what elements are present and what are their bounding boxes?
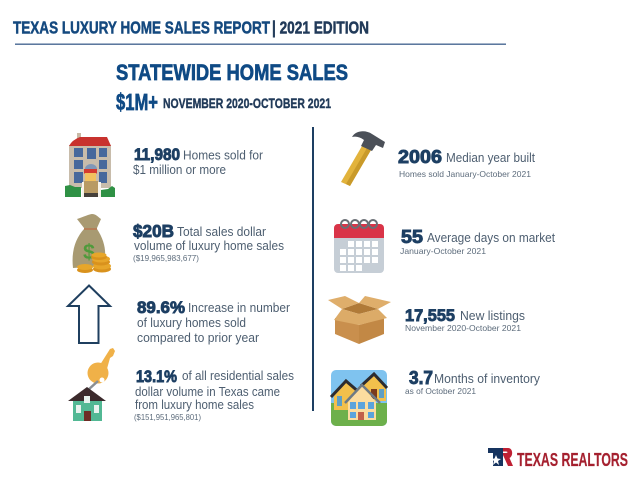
stat: homes sold: $1 million or more [133,162,226,177]
icon: mansion [65,133,115,197]
icon: up arrow [68,286,110,343]
stat: increase: Increase in number [188,300,291,315]
stat: total sales volume: $20B [133,221,174,241]
stat: increase: compared to prior year [137,330,260,345]
stat: new listings [405,306,525,333]
stat: months of inventory: Months of inventory [434,371,540,386]
stat: days on market: Average days on market [427,230,555,245]
stat: total sales volume: ($19,965,983,677) [133,253,199,263]
stat: days on market [400,227,555,256]
report header: | 2021 EDITION [272,18,369,38]
stat: share of sales volume: dollar volume in Texas came [135,384,280,399]
stat: months of inventory: as of October 2021 [405,386,476,396]
stat: new listings: November 2020-October 2021 [405,323,521,333]
stat: median year built: Median year built [446,150,535,165]
title: STATEWIDE HOME SALES [116,60,348,85]
stat: increase [137,298,291,345]
stat: share of sales volume: of all residential sales [182,368,294,383]
stat: months of inventory [405,368,540,396]
stat: new listings: New listings [460,308,525,323]
stat: days on market: January-October 2021 [400,246,486,256]
logo: Texas Realtors [488,448,628,470]
stat: homes sold: 11,980 [134,145,180,164]
stat: total sales volume: volume of luxury home sales [134,238,284,253]
stat: share of sales volume: from luxury home sales [135,397,254,412]
icon: houses [331,370,387,426]
title [116,60,348,115]
stat: days on market: 55 [401,227,423,247]
icon: money bag: $ [83,241,95,264]
stat: new listings: 17,555 [405,306,455,325]
stat: increase: 89.6% [137,298,185,317]
stat: share of sales volume [134,367,294,422]
stat: increase: of luxury homes sold [137,315,246,330]
title: $1M+ [116,89,158,115]
stat: median year built: Homes sold January-October 2021 [399,169,531,179]
stat: homes sold [133,145,264,177]
report header: TEXAS LUXURY HOME SALES REPORT [13,18,270,38]
stat: median year built: 2006 [398,147,442,167]
center divider [312,127,314,411]
icon: calendar [334,220,384,273]
icon: key and house [68,348,115,421]
stat: total sales volume [133,221,284,263]
stat: median year built [398,147,535,179]
stat: homes sold: Homes sold for [183,148,264,162]
stat: share of sales volume: ($151,951,965,801) [134,412,201,422]
icon: hammer [341,131,385,186]
stat: total sales volume: Total sales dollar [177,224,267,239]
stat: months of inventory: 3.7 [409,368,433,388]
icon: money bag [73,214,111,273]
icon: cardboard box [328,296,391,344]
title: NOVEMBER 2020-OCTOBER 2021 [163,95,331,111]
stat: share of sales volume: 13.1% [136,367,177,386]
